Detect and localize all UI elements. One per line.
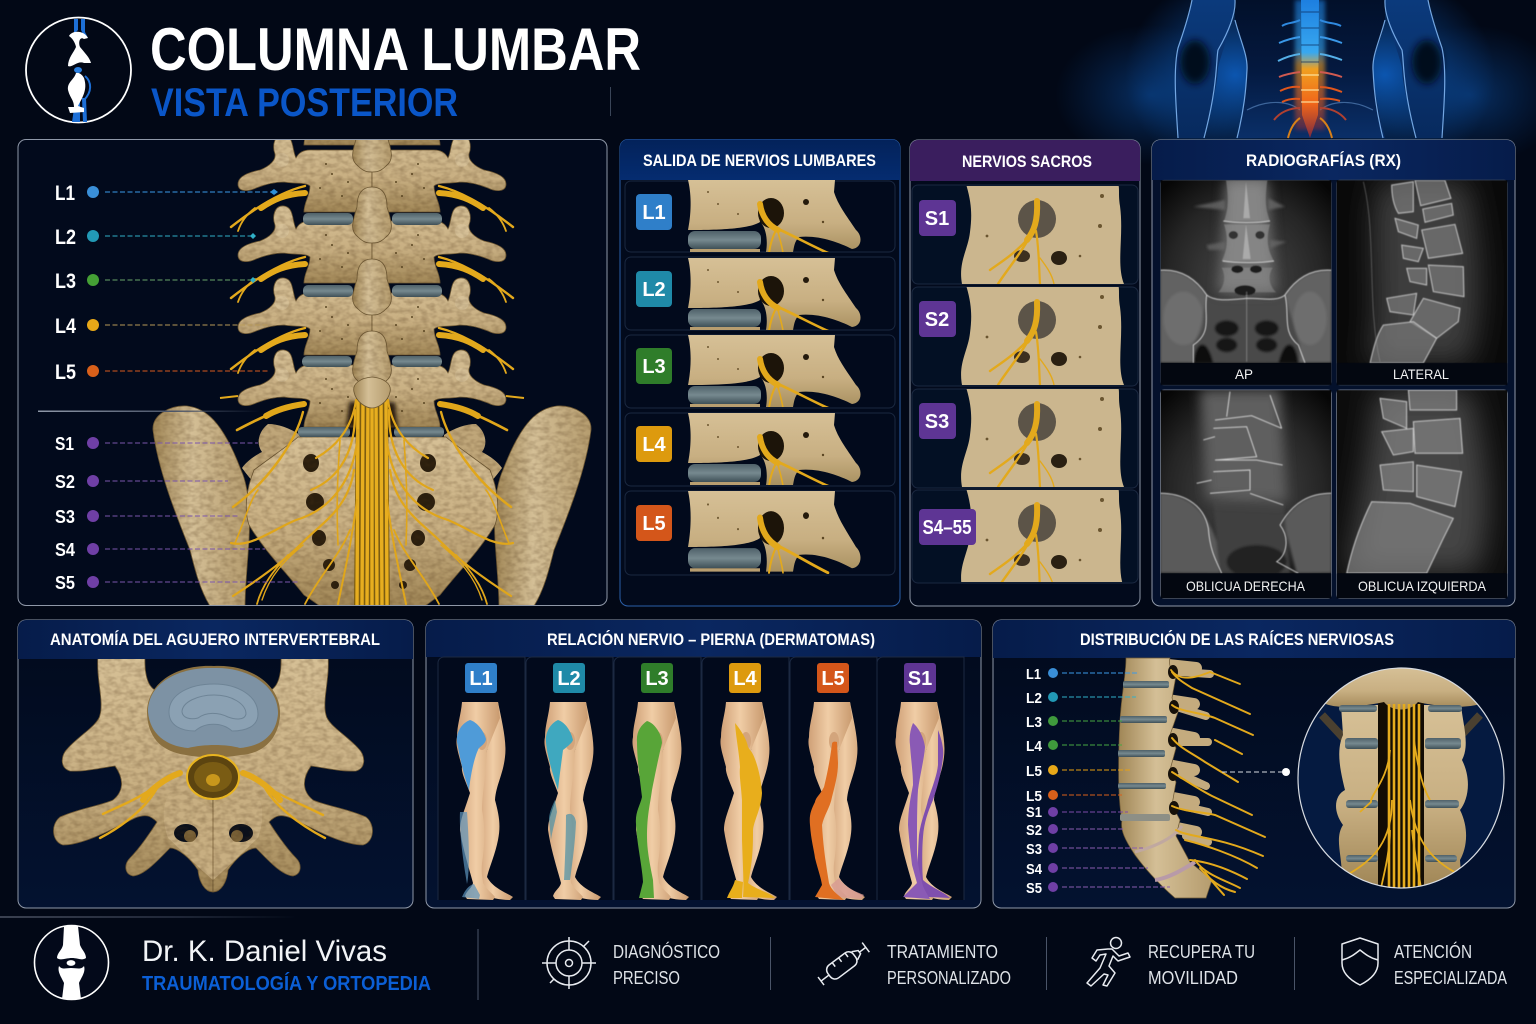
level labels and leader lines: L3 (55, 270, 76, 293)
row L1: L1 (642, 202, 666, 224)
intervertebral disc (147, 666, 280, 757)
icon: syringe (816, 941, 871, 987)
header logo: knee in a circle (26, 18, 131, 122)
column L5 (790, 657, 877, 900)
row S1: S1 (925, 208, 949, 230)
root labels and leaders: S1 (1026, 804, 1042, 821)
level labels and leader lines: L2 (55, 226, 76, 249)
spinal canal and nerve roots (100, 755, 325, 838)
icon: runner (1087, 938, 1130, 986)
footer logo: knee joint (34, 926, 108, 1000)
heading: RADIOGRAFÍAS (RX) (1246, 151, 1401, 170)
lowest spinous process (354, 377, 390, 408)
benefit: personalized treatment (887, 942, 1011, 988)
heading: SALIDA DE NERVIOS LUMBARES (643, 151, 876, 170)
panel: nerve root distribution (993, 620, 1515, 908)
benefit: recover mobility: RECUPERA TU (1148, 942, 1255, 962)
subtitle: VISTA POSTERIOR (151, 81, 458, 125)
root labels and leaders (1026, 666, 1170, 897)
root labels and leaders: S5 (1026, 880, 1042, 897)
x-ray captions: AP (1235, 366, 1253, 382)
root labels and leaders: L5 (1026, 763, 1042, 780)
discs (298, 213, 444, 437)
row S1 (912, 184, 1138, 284)
benefit: personalized treatment: TRATAMIENTO (887, 942, 998, 962)
benefit: precise diagnosis: PRECISO (613, 968, 680, 988)
row L4 (625, 413, 895, 486)
row L3 (625, 335, 895, 408)
column L3: L3 (645, 668, 669, 690)
root labels and leaders: L2 (1026, 690, 1042, 707)
root labels and leaders: S2 (1026, 822, 1042, 839)
benefit: specialised care: ATENCIÓN (1394, 941, 1472, 962)
root labels and leaders: L3 (1026, 714, 1042, 731)
root labels and leaders: L1 (1026, 666, 1041, 683)
level labels and leader lines: S4 (55, 540, 75, 560)
column L1: L1 (469, 668, 493, 690)
level labels and leader lines: S2 (55, 472, 75, 492)
heading: RELACIÓN NERVIO – PIERNA (DERMATOMAS) (547, 630, 875, 649)
level labels and leader lines: S5 (55, 573, 75, 593)
axial vertebra bone (54, 655, 372, 892)
benefit: recover mobility (1148, 942, 1255, 988)
row L2 (625, 257, 895, 331)
row S4-S5 (912, 488, 1138, 588)
row S2 (912, 285, 1138, 386)
lateral spine illustration (1118, 658, 1265, 898)
nerve roots (220, 186, 524, 398)
heading (910, 140, 1140, 181)
benefit: precise diagnosis (613, 941, 720, 988)
icon: shield (1342, 938, 1378, 985)
ilium wings and sacrum (153, 406, 591, 606)
x-ray lateral (1337, 180, 1507, 385)
row S3: S3 (925, 411, 949, 433)
level labels and leader lines: L5 (55, 361, 76, 384)
panel: nerve-leg dermatomes (426, 620, 981, 908)
row L1 (625, 180, 895, 253)
root labels and leaders: L4 (1026, 738, 1043, 755)
x-ray captions: OBLICUA DERECHA (1186, 578, 1306, 594)
row S3 (912, 387, 1138, 488)
benefit: specialised care: ESPECIALIZADA (1394, 968, 1507, 988)
panel: sacral nerves (910, 140, 1140, 606)
x-ray captions: OBLICUA IZQUIERDA (1358, 578, 1487, 594)
column L5: L5 (821, 668, 845, 690)
heading: DISTRIBUCIÓN DE LAS RAÍCES NERVIOSAS (1080, 630, 1394, 649)
connector to magnified view (1222, 768, 1290, 776)
row L4: L4 (642, 434, 667, 456)
column L1 (438, 657, 525, 900)
heading: NERVIOS SACROS (962, 152, 1092, 171)
x-ray captions (1186, 366, 1487, 594)
heading (18, 620, 413, 659)
row L5 (625, 491, 895, 575)
level labels and leader lines: L4 (55, 315, 76, 338)
root labels and leaders: L5 (1026, 788, 1042, 805)
row L5: L5 (642, 513, 666, 535)
panel: intervertebral foramen anatomy (18, 620, 413, 908)
benefit: recover mobility: MOVILIDAD (1148, 968, 1238, 988)
row S4-S5: S4–55 (922, 517, 972, 539)
panel: posterior lumbar spine and sacrum (18, 139, 608, 606)
column L2: L2 (557, 668, 581, 690)
cauda equina (231, 398, 513, 606)
column S1: S1 (908, 668, 932, 690)
column L3 (614, 657, 701, 900)
heading (620, 140, 900, 180)
benefit: personalized treatment: PERSONALIZADO (887, 968, 1011, 988)
specialty: TRAUMATOLOGÍA Y ORTOPEDIA (142, 972, 431, 995)
row L3: L3 (642, 356, 666, 378)
torso illustration with glowing spine (1055, 0, 1536, 175)
icon: target (542, 937, 596, 989)
heading: ANATOMÍA DEL AGUJERO INTERVERTEBRAL (50, 630, 380, 649)
column S1 (877, 657, 964, 900)
column L4 (702, 657, 789, 900)
row L2: L2 (642, 279, 666, 301)
x-ray captions: LATERAL (1393, 366, 1449, 382)
magnified cauda equina circle (1298, 668, 1504, 890)
panel: X-rays (1152, 140, 1515, 606)
column L2 (526, 657, 613, 900)
level labels and leader lines: L1 (55, 182, 75, 205)
row S2: S2 (925, 309, 949, 331)
benefit: specialised care (1394, 941, 1507, 988)
level labels and leader lines: S3 (55, 507, 75, 527)
level labels and leader lines: S1 (55, 434, 74, 454)
x-ray right oblique (1160, 390, 1332, 598)
panel: lumbar nerve exits (620, 140, 900, 606)
benefit: precise diagnosis: DIAGNÓSTICO (613, 941, 720, 962)
x-ray left oblique (1337, 390, 1507, 598)
column L4: L4 (733, 668, 758, 690)
x-ray AP (1160, 180, 1332, 385)
level labels and leader lines (38, 182, 298, 593)
title: COLUMNA LUMBAR (150, 16, 641, 83)
heading (1152, 140, 1515, 180)
footer divider line (0, 916, 300, 918)
doctor name: Dr. K. Daniel Vivas (142, 935, 387, 968)
heading (426, 620, 981, 657)
heading (993, 620, 1515, 658)
root labels and leaders: S3 (1026, 841, 1042, 858)
root labels and leaders: S4 (1026, 861, 1043, 878)
vertebrae (238, 140, 506, 428)
